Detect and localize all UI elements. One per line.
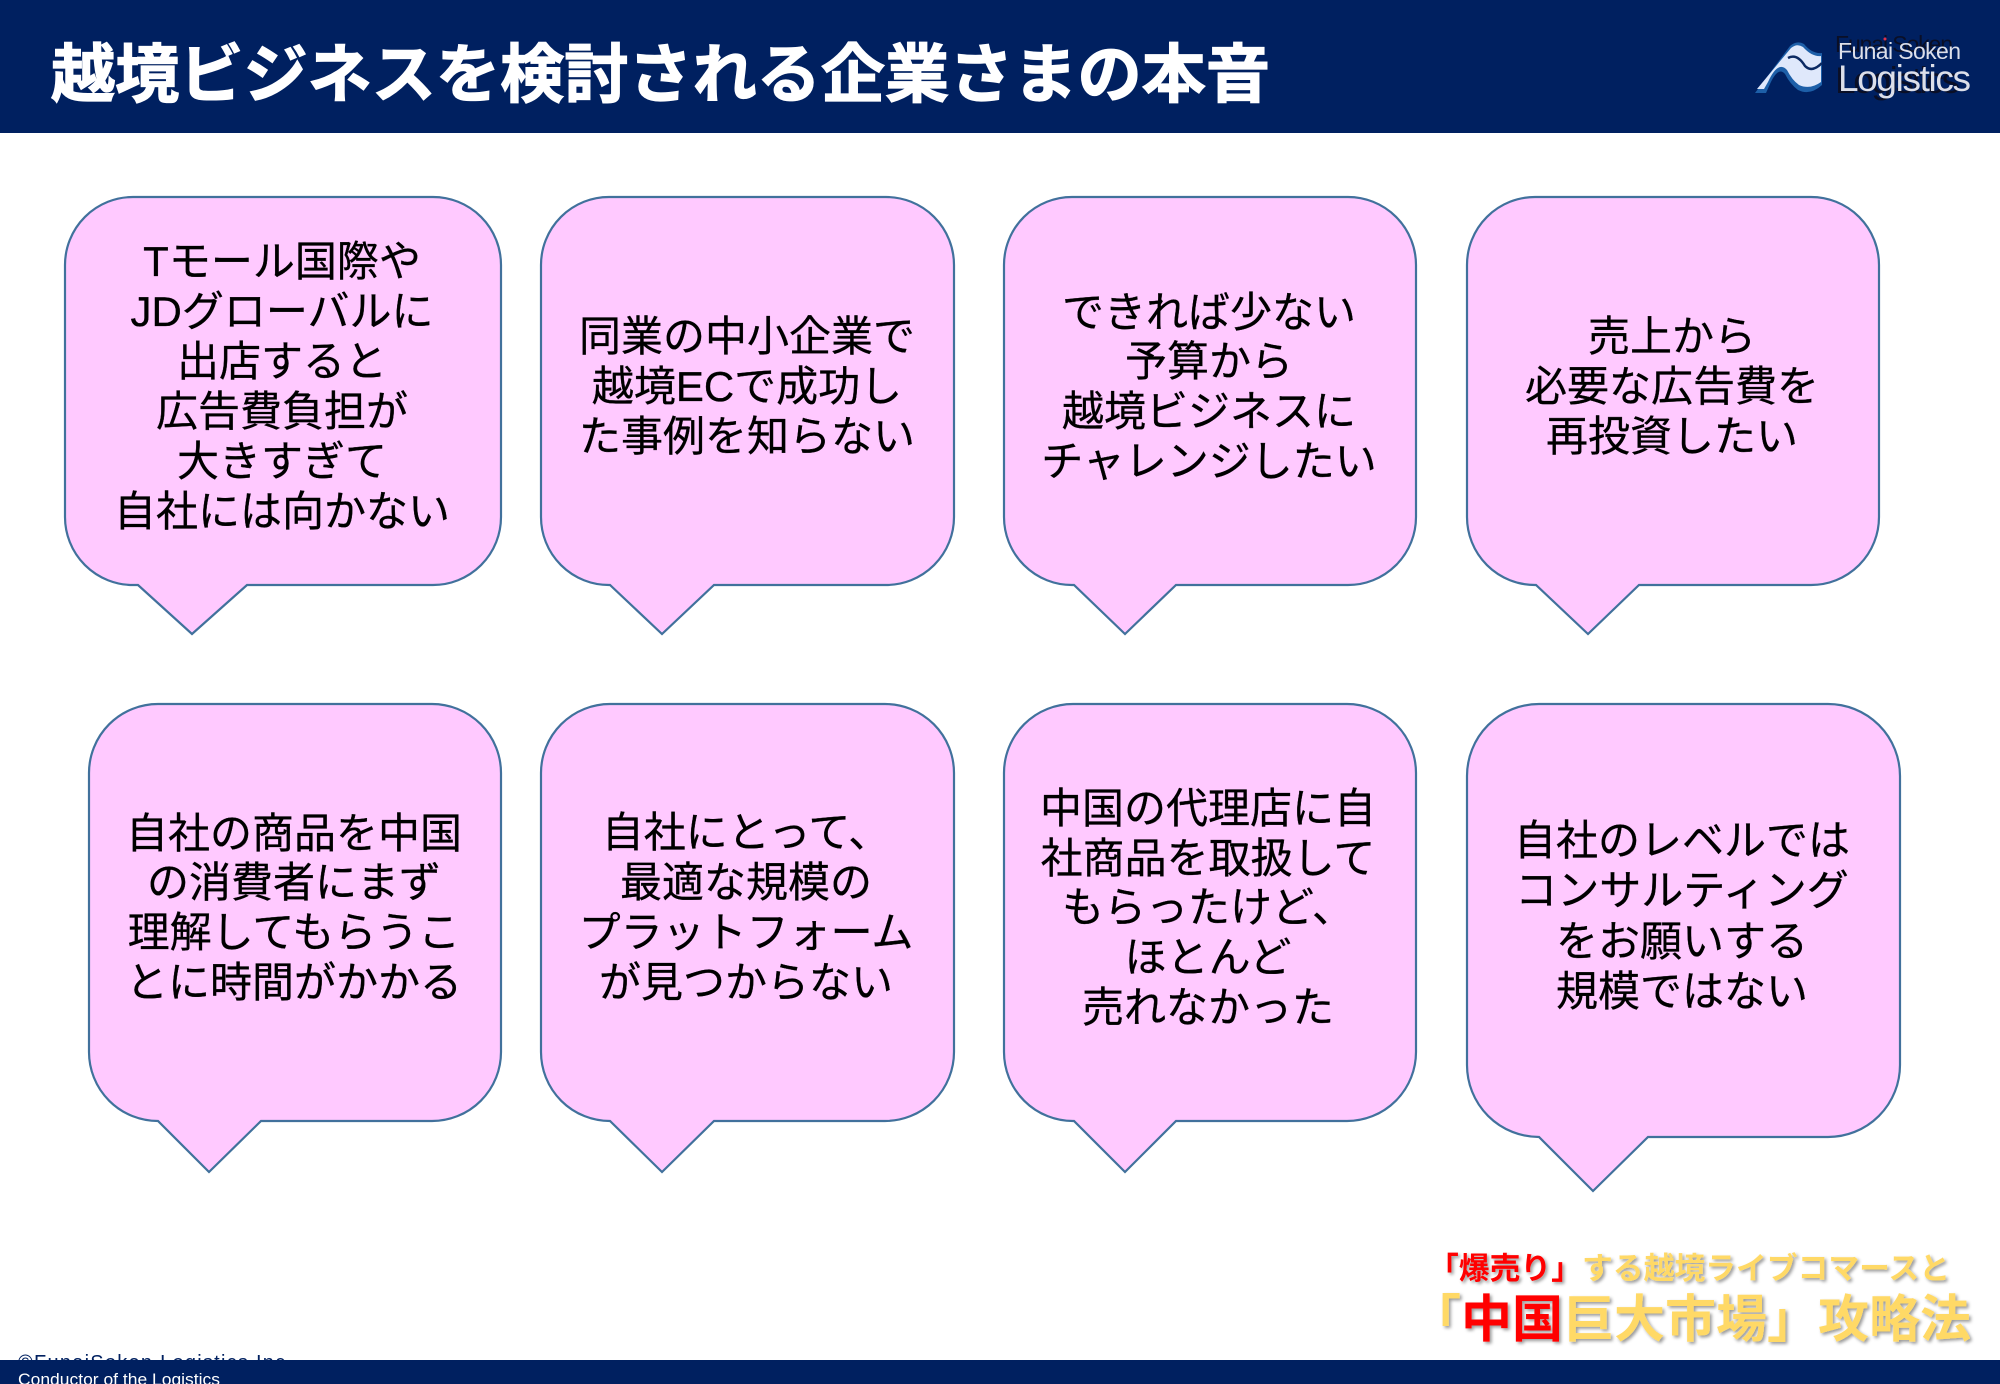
- bubble text: 同業の中小企業で: [579, 313, 915, 360]
- logo text shadow: Funai Soken: [1835, 31, 1953, 57]
- bubble shape: [541, 197, 954, 634]
- promo line 2: 「中国巨大市場」攻略法: [1410, 1291, 1971, 1348]
- bubble text: 必要な広告費を: [1525, 363, 1819, 410]
- bubble text: 社商品を取扱して: [1041, 835, 1375, 882]
- bubble text: JDグローバルに: [131, 288, 433, 335]
- bubble shape: [541, 704, 954, 1172]
- promo text: book title: [1410, 1251, 1971, 1348]
- bubble text: とに時間がかかる: [126, 959, 462, 1006]
- header bar: [0, 0, 2000, 133]
- logo text shadow: Logistics: [1835, 60, 1960, 101]
- bubble text: が見つからない: [599, 959, 893, 1006]
- panel: speech bubble 4: [1467, 197, 1879, 634]
- logo red dot: [1884, 38, 1886, 40]
- bubble text: できれば少ない: [1062, 289, 1356, 336]
- bubble text: 再投資したい: [1546, 413, 1798, 460]
- bubble shape: [1004, 704, 1416, 1172]
- bubble shape: [89, 704, 501, 1172]
- bubble text: ほとんど: [1125, 934, 1291, 981]
- logo text: Logistics: [1838, 58, 1971, 99]
- bubble text: 中国の代理店に自: [1040, 785, 1376, 832]
- bubble text: をお願いする: [1556, 918, 1808, 965]
- bubble shape: [65, 197, 501, 634]
- footer bar: [0, 1360, 2000, 1384]
- panel: speech bubble 6: [541, 704, 954, 1172]
- promo line 1: 「爆売り」する越境ライブコマースと: [1428, 1251, 1950, 1286]
- bubble text: 自社には向かない: [114, 488, 450, 535]
- panel: speech bubble 7: [1004, 704, 1416, 1172]
- bubble text: 予算から: [1125, 338, 1293, 385]
- bubble text: 自社のレベルでは: [1514, 817, 1850, 864]
- bubble text: 越境ECで成功し: [592, 363, 902, 410]
- logo text: Funai Soken: [1838, 38, 1961, 64]
- bubble shape: [1467, 704, 1900, 1191]
- bubble text: 出店すると: [177, 338, 387, 385]
- bubble text: もらったけど、: [1062, 884, 1354, 931]
- bubble text: 自社の商品を中国: [126, 810, 462, 857]
- panel: speech bubble 2: [541, 197, 954, 634]
- bubble text: 広告費負担が: [156, 388, 408, 435]
- panel: speech bubble 3: [1004, 197, 1416, 634]
- bubble text: 理解してもらうこ: [128, 909, 460, 956]
- bubble text: プラットフォーム: [579, 909, 913, 956]
- bubble text: 売れなかった: [1082, 984, 1334, 1031]
- bubble text: の消費者にまず: [147, 859, 441, 906]
- logo text shadow: [1835, 31, 1960, 101]
- bubble shape: [1004, 197, 1416, 634]
- logo: Funai Soken Logistics: [1755, 31, 1971, 101]
- bubble text: コンサルティング: [1515, 867, 1849, 914]
- copyright text: ©FunaiSoken Logistics Inc.: [18, 1352, 292, 1374]
- icon: wave mark: [1755, 42, 1822, 93]
- bubble text: 規模ではない: [1556, 968, 1808, 1015]
- bubble text: た事例を知らない: [579, 413, 915, 460]
- panel: speech bubble 1: [65, 197, 501, 634]
- bubble text: チャレンジしたい: [1041, 438, 1377, 485]
- bubble text: 越境ビジネスに: [1062, 388, 1356, 435]
- bubble text: Tモール国際や: [143, 238, 421, 285]
- bubble text: 大きすぎて: [177, 438, 387, 485]
- panel: speech bubble 5: [89, 704, 501, 1172]
- panel: speech bubble 8: [1467, 704, 1900, 1191]
- logo text: [1838, 38, 1971, 99]
- title: 越境ビジネスを検討される企業さまの本音: [51, 39, 1270, 111]
- bubble text: 自社にとって、: [602, 809, 890, 856]
- bubble text: 売上から: [1588, 313, 1756, 360]
- bubble text: 最適な規模の: [620, 859, 872, 906]
- bubble shape: [1467, 197, 1879, 634]
